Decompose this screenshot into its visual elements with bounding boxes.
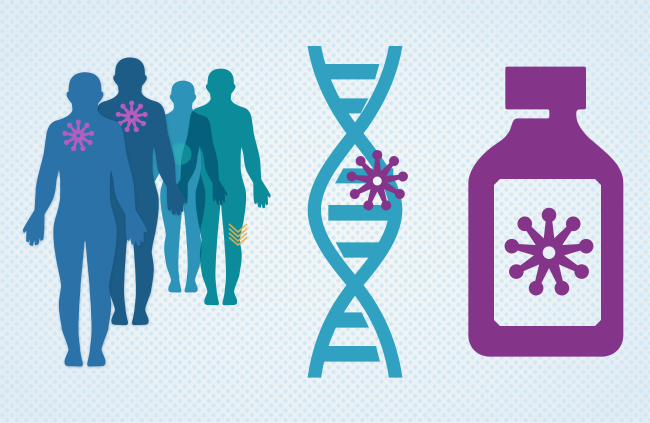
icon: purple virus on bottle label [503, 208, 595, 297]
DNA double helix [311, 30, 399, 393]
icon: pink virus on front figure [62, 120, 95, 152]
DNA strand: top right to bottom right [314, 30, 399, 393]
icon: spiky cell on abdomen [170, 143, 192, 165]
person: back teal-blue figure [139, 81, 227, 292]
group of people [23, 58, 270, 366]
icon: yellow chevrons on knee [229, 224, 247, 245]
DNA strand: top left to bottom left [311, 30, 396, 393]
person: dark blue figure [74, 58, 186, 325]
person: teal figure [171, 69, 270, 305]
person: front blue figure [23, 73, 147, 366]
icon: purple virus on DNA [346, 150, 409, 212]
icon: pink virus on dark blue figure [115, 100, 148, 133]
medicine bottle [468, 67, 623, 357]
DNA rungs [323, 64, 397, 362]
overlap of teal figures [177, 110, 228, 260]
